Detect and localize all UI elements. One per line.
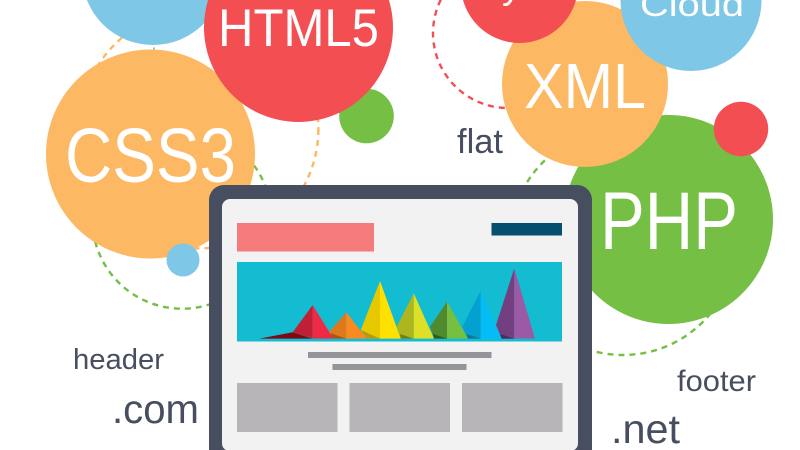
dashed orbit: green left xyxy=(92,129,272,309)
bubble: small green xyxy=(339,89,394,143)
bubble: HTML5 xyxy=(204,0,393,122)
label: .com: .com xyxy=(112,386,199,432)
hero banner xyxy=(237,262,562,342)
label: footer: footer xyxy=(677,365,756,398)
bubble: CSS3 xyxy=(46,50,255,258)
label: flat: flat xyxy=(457,123,504,161)
dashed orbit: orange xyxy=(80,10,318,248)
monitor screen xyxy=(222,199,578,450)
dashed orbit: blue fragment xyxy=(153,48,155,50)
bubble: small red xyxy=(714,102,768,156)
pyramid: red xyxy=(259,305,333,339)
bubble: red top xyxy=(461,0,578,43)
bubble: blue top left xyxy=(82,0,224,45)
text line placeholder 2 xyxy=(332,364,466,370)
bubble: CSS3: CSS3 xyxy=(65,113,236,199)
bubble: PHP xyxy=(564,115,773,324)
pyramid: yellow xyxy=(361,281,401,339)
pyramid: orange xyxy=(329,312,367,339)
page header: logo block xyxy=(237,223,374,252)
pyramid: green xyxy=(430,302,468,339)
content box 2 xyxy=(350,383,450,432)
bubble: PHP: PHP xyxy=(600,176,738,267)
page header: nav block xyxy=(492,223,562,236)
pyramid: purple xyxy=(496,268,535,339)
monitor xyxy=(209,185,592,450)
bubble: XML: XML xyxy=(524,50,646,122)
pyramid: lime xyxy=(397,293,434,339)
label: header: header xyxy=(73,344,164,376)
content box 3 xyxy=(462,383,562,432)
bubble: HTML5: HTML5 xyxy=(218,0,379,58)
bubble: small blue xyxy=(166,244,200,276)
bubble: Cloud xyxy=(620,0,762,71)
dashed orbit: green right xyxy=(510,129,736,355)
dashed orbit: red xyxy=(433,0,583,108)
pyramid: blue xyxy=(462,291,502,339)
text line placeholder 1 xyxy=(308,352,492,358)
bubble: XML xyxy=(502,1,668,167)
monitor frame xyxy=(209,185,592,450)
content box 1 xyxy=(237,383,338,432)
